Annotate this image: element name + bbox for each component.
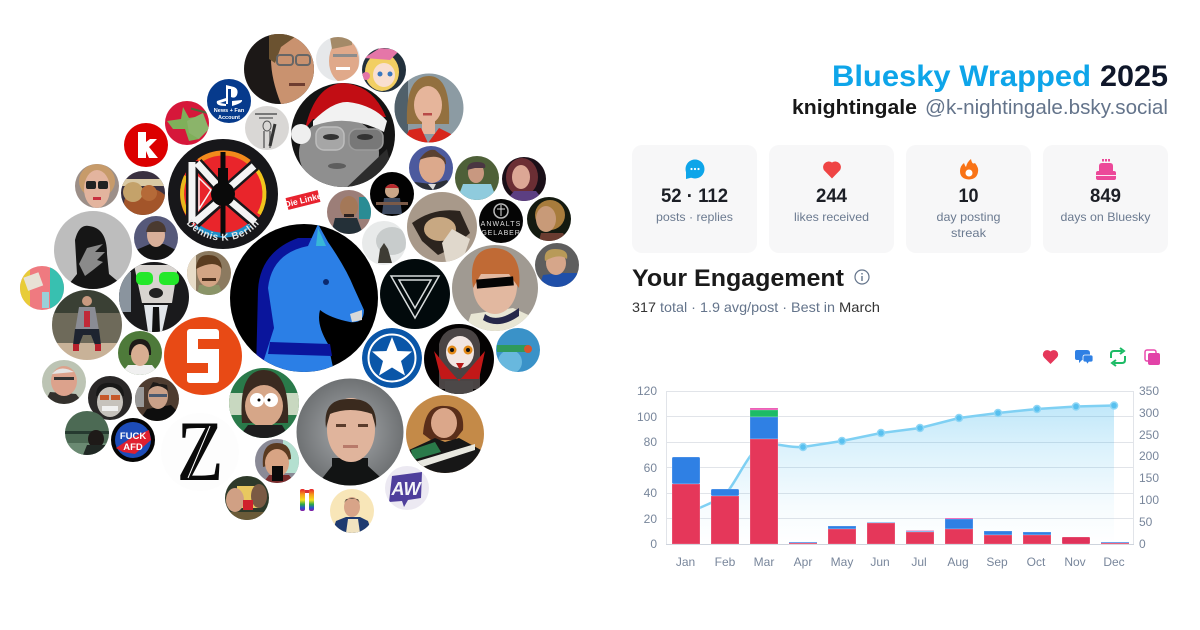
right axis labels: 0 <box>1139 537 1146 551</box>
avatar: child with censored eyes <box>452 245 538 331</box>
avatar: red k logo <box>124 123 168 167</box>
panel: days on Bluesky: days on Bluesky <box>1060 210 1150 224</box>
chart legend icons <box>1043 348 1160 366</box>
cumulative line <box>686 406 1114 514</box>
panel: posts and replies <box>632 145 757 253</box>
avatar: PlayStation news account <box>207 79 251 123</box>
avatar: AW speech bubble logo <box>385 466 429 510</box>
avatar: monochrome man with moustache <box>88 376 132 420</box>
left axis labels: 80 <box>644 435 657 449</box>
avatar: blond footballer <box>535 243 579 287</box>
right axis labels: 100 <box>1139 493 1159 507</box>
left axis labels <box>637 384 657 551</box>
avatar: Dennis K Berlin logo <box>168 139 278 249</box>
title: 2025 <box>1100 60 1168 93</box>
avatar: Anwalts Gelaber logo <box>479 199 523 243</box>
left axis labels: 40 <box>644 486 657 500</box>
avatar: blue star shield <box>362 328 422 388</box>
avatar: man in crowd <box>327 190 371 234</box>
month labels: Mar <box>754 555 774 569</box>
avatar: woman with red hair <box>502 157 546 201</box>
panel: days on Bluesky <box>1043 145 1168 253</box>
icon: quotes <box>1145 350 1160 365</box>
left axis labels: 60 <box>644 461 657 475</box>
bar: Jul <box>906 530 934 544</box>
right axis labels: 200 <box>1139 449 1159 463</box>
avatar: sketch drawing <box>245 106 289 150</box>
avatar: smiling woman outdoors <box>118 331 162 375</box>
avatar: woman in santa hat <box>291 83 395 189</box>
panel: posts and replies: 52 · 112 <box>661 186 728 207</box>
avatar: Fuck AfD button: FUCK <box>120 431 146 442</box>
avatar: older man with glasses <box>42 360 86 404</box>
month labels: May <box>831 555 853 569</box>
avatar: brown sculpture close-up <box>407 192 477 262</box>
icon: heart <box>823 161 841 178</box>
bar: Sep <box>984 531 1012 544</box>
engagement summary: total · 1.9 avg/post · Best in <box>660 299 835 315</box>
icon: birthday cake <box>1096 159 1116 180</box>
engagement summary <box>632 299 880 315</box>
month labels: Feb <box>715 555 736 569</box>
right axis labels: 150 <box>1139 471 1159 485</box>
panel: day posting streak <box>906 145 1031 253</box>
bar: Nov <box>1062 537 1090 544</box>
avatar: blue horse <box>230 224 378 372</box>
avatar: orange S logo <box>164 317 242 395</box>
icon: flame <box>960 159 978 180</box>
avatar: smiling woman on wood floor <box>406 395 484 473</box>
avatar: smiling man light background <box>316 37 360 83</box>
right axis labels <box>1139 384 1159 551</box>
avatar: green room portrait <box>65 411 109 455</box>
month labels: Nov <box>1064 555 1086 569</box>
bar: Aug <box>945 518 973 544</box>
left axis labels: 20 <box>644 512 657 526</box>
avatar: Anwalts Gelaber logo: GELABER <box>481 230 521 237</box>
avatar: serif Z logo: Z <box>177 403 223 499</box>
avatar: Die Linke logo: Die Linke <box>283 191 323 209</box>
avatar: foggy landscape <box>362 221 408 265</box>
panel: day posting streak: streak <box>951 226 987 240</box>
bar: Feb <box>711 489 739 544</box>
avatar: AW speech bubble logo: AW <box>390 479 423 499</box>
month labels: Jul <box>911 555 927 569</box>
bar: Jan <box>672 457 700 544</box>
bar: Mar <box>750 408 778 544</box>
left axis labels: 120 <box>637 384 657 398</box>
user identity: @k-nightingale.bsky.social <box>925 97 1168 119</box>
user identity <box>792 97 1168 119</box>
month labels: Apr <box>794 555 812 569</box>
avatar: PlayStation news account: News + Fan <box>214 108 245 114</box>
avatar: South Park style cartoon <box>229 368 299 438</box>
month labels: Jan <box>676 555 695 569</box>
avatar: man in blue blazer <box>330 489 374 533</box>
avatar: man in light blue shirt <box>455 156 499 200</box>
engagement summary: March <box>839 299 880 315</box>
icon: likes <box>1043 350 1058 364</box>
panel: day posting streak: day posting <box>936 210 1000 224</box>
avatar: dog in suit with green glasses <box>119 262 189 332</box>
right axis labels: 250 <box>1139 428 1159 442</box>
avatar: blue underwater scene <box>496 328 540 374</box>
icon: info <box>855 270 869 284</box>
avatar: moustached man <box>187 251 231 295</box>
panel: day posting streak: 10 <box>958 186 978 207</box>
engagement summary: 317 <box>632 299 656 315</box>
right axis labels: 50 <box>1139 515 1153 529</box>
avatar: hooded figure <box>54 211 132 289</box>
panel: likes received <box>769 145 894 253</box>
avatar: blonde woman in red <box>394 73 464 143</box>
avatar: man with glasses <box>244 34 314 104</box>
month labels: Sep <box>986 555 1008 569</box>
left axis labels: 100 <box>637 410 657 424</box>
bar: May <box>828 526 856 544</box>
title: Bluesky Wrapped <box>832 60 1091 93</box>
icon: speech bubble <box>686 160 704 179</box>
user identity: knightingale <box>792 97 917 119</box>
icon: reposts <box>1111 348 1125 366</box>
avatar: balding man in suit <box>409 146 453 190</box>
panel: likes received: 244 <box>816 186 847 207</box>
avatar: Anwalts Gelaber logo: ANWALTS <box>481 221 521 228</box>
month labels: Oct <box>1027 555 1046 569</box>
right axis labels: 350 <box>1139 384 1159 398</box>
avatar: man with cap <box>134 216 178 260</box>
line markers <box>800 402 1118 450</box>
avatar: man with glasses in black <box>135 377 179 421</box>
month labels: Jun <box>870 555 890 569</box>
avatar: Fuck AfD button: AFD <box>123 442 143 453</box>
avatar: man in black polo <box>296 378 404 486</box>
bar: Jun <box>867 522 895 544</box>
avatar: person on floral sofa <box>52 290 122 360</box>
panel: likes received: likes received <box>794 210 869 224</box>
avatar: bitmoji with cap <box>370 172 414 216</box>
icon: replies <box>1075 350 1093 364</box>
month labels: Dec <box>1103 555 1125 569</box>
avatar: anime character <box>362 48 406 92</box>
avatar: Dennis K Berlin logo: Dennis K Berlin <box>186 220 259 241</box>
right axis labels: 300 <box>1139 406 1159 420</box>
panel: days on Bluesky: 849 <box>1090 186 1121 207</box>
month labels: Aug <box>947 555 969 569</box>
panel: posts and replies: posts · replies <box>656 210 733 224</box>
avatar: cannabis fist <box>165 101 210 145</box>
heading: Your Engagement: Your Engagement <box>632 265 844 292</box>
bar: Oct <box>1023 532 1051 544</box>
avatar: cartoon bear <box>121 171 165 215</box>
avatar: mirror selfie <box>255 439 299 483</box>
stacked bars <box>672 408 1129 544</box>
avatar: blond bearded man <box>527 197 571 241</box>
avatar: colourful protest poster <box>20 266 64 310</box>
avatar: blonde with sunglasses <box>75 164 119 208</box>
cumulative area <box>686 406 1114 544</box>
avatar: group photo with beer <box>225 476 269 520</box>
avatar: rainbow figures <box>300 489 314 511</box>
avatar: Fuck AfD button <box>111 418 155 462</box>
chart: monthly engagement <box>637 384 1159 569</box>
bar: Dec <box>1101 542 1129 544</box>
panel: avatar bubble cluster <box>20 34 579 533</box>
avatar: inverted triangle logo <box>380 259 450 329</box>
month labels <box>676 555 1125 569</box>
bar: Apr <box>789 542 817 544</box>
avatar: vampire emoji <box>424 324 494 394</box>
left axis labels: 0 <box>650 537 657 551</box>
avatar: PlayStation news account: Account <box>218 115 240 121</box>
